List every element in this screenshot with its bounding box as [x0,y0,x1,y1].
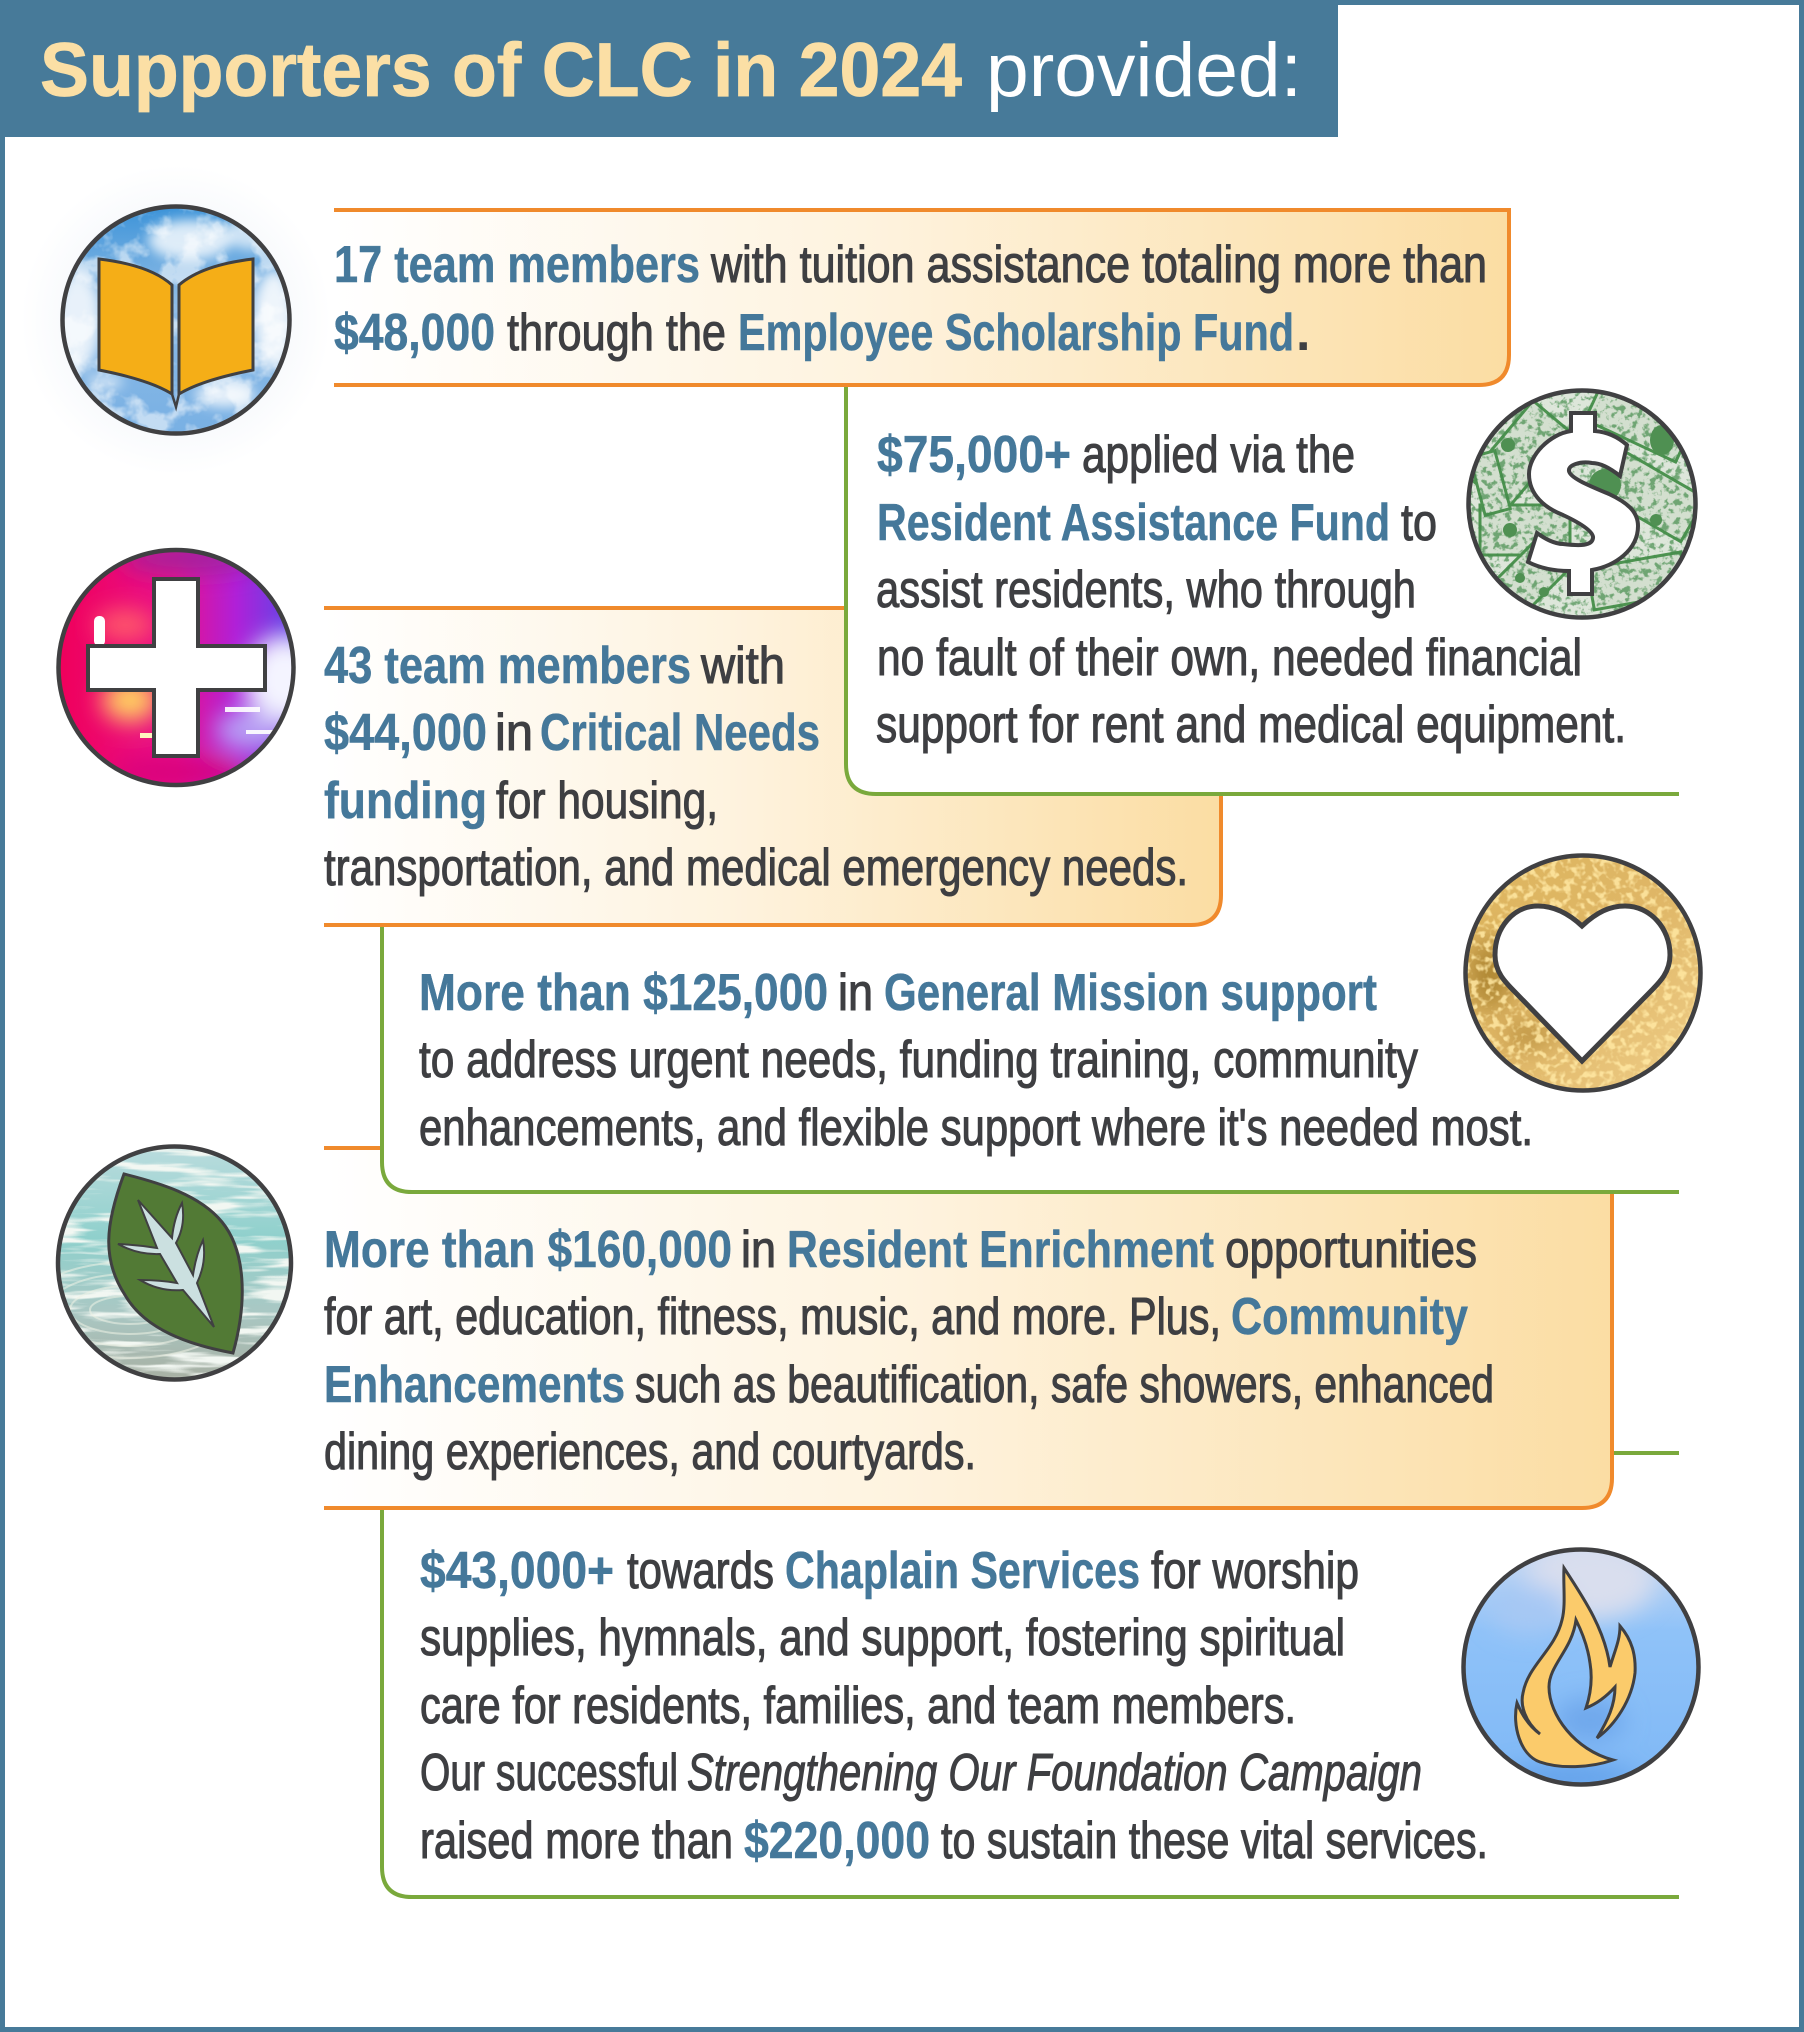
panel: resident enrichment: such as beautification, safe showers, enhanced [635,1356,1494,1414]
panel: critical needs: with [700,637,785,695]
panel: employee scholarship fund: . [1296,304,1310,362]
panel: resident enrichment: in [741,1221,776,1279]
panel: critical needs: $44,000 [324,704,487,762]
panel: chaplain services: $43,000+ [420,1542,614,1600]
panel: general mission support: More than $125,000 [419,964,828,1022]
icon: book [56,205,294,437]
panel: resident assistance fund: assist residents, who through [876,561,1416,619]
panel: chaplain services: Chaplain Services [785,1542,1140,1600]
panel: general mission support [382,925,1679,1192]
title banner: provided: [986,28,1302,113]
panel: general mission support: enhancements, and flexible support where it's needed most. [419,1099,1533,1157]
panel: chaplain services: for worship [1151,1542,1359,1600]
icon: flame [1462,1540,1702,1790]
panel: employee scholarship fund [334,210,1509,385]
panel: employee scholarship fund: 17 team members [334,236,700,294]
panel: employee scholarship fund: $48,000 [334,304,495,362]
panel: resident enrichment: Community [1231,1288,1468,1346]
panel: resident enrichment: for art, education, fitness, music, and more. Plus, [324,1288,1221,1346]
panel: resident enrichment: Enhancements [324,1356,625,1414]
panel: resident assistance fund: to [1401,494,1437,552]
panel: resident assistance fund: support for rent and medical equipment. [876,696,1626,754]
panel: chaplain services: Strengthening Our Foundation Campaign [687,1744,1422,1802]
title banner: Supporters of CLC in 2024 [40,28,962,113]
panel: resident enrichment: More than $160,000 [324,1221,732,1279]
title banner [0,0,1338,137]
panel: general mission support: General Mission support [884,964,1377,1022]
panel: critical needs: 43 team members [324,637,691,695]
panel: chaplain services: supplies, hymnals, and support, fostering spiritual [420,1609,1345,1667]
panel: chaplain services [382,1453,1679,1897]
panel: general mission support: to address urgent needs, funding training, community [419,1031,1418,1089]
panel: general mission support: in [838,964,873,1022]
panel: resident assistance fund: Resident Assistance Fund [877,494,1390,552]
panel: resident assistance fund: $75,000+ [877,426,1071,484]
panel: critical needs: transportation, and medical emergency needs. [324,839,1188,897]
panel: employee scholarship fund: with tuition assistance totaling more than [710,236,1487,294]
panel: chaplain services: raised more than [420,1812,733,1870]
icon: heart [1463,853,1703,1093]
panel: resident enrichment: Resident Enrichment [787,1221,1214,1279]
panel: critical needs [324,608,1221,925]
panel: chaplain services: Our successful [420,1744,678,1802]
panel: employee scholarship fund: Employee Scholarship Fund [738,304,1294,362]
panel: resident enrichment [324,1148,1612,1508]
icon: dollar sign [1466,388,1698,620]
icon: medical cross [56,548,296,788]
panel: chaplain services: towards [627,1542,774,1600]
panel: chaplain services: $220,000 [744,1812,930,1870]
panel: resident enrichment: opportunities [1225,1221,1477,1279]
panel: critical needs: funding [324,772,487,830]
panel: resident assistance fund: no fault of their own, needed financial [877,629,1582,687]
panel: resident assistance fund [846,385,1679,794]
panel: critical needs: in [495,704,533,762]
panel: resident assistance fund: applied via the [1082,426,1355,484]
panel: critical needs: Critical Needs [540,704,820,762]
book icon halo [21,165,331,475]
panel: chaplain services: care for residents, families, and team members. [420,1677,1296,1735]
panel: resident enrichment: dining experiences, and courtyards. [324,1423,976,1481]
panel: chaplain services: to sustain these vital services. [941,1812,1488,1870]
panel: critical needs: for housing, [496,772,718,830]
panel: employee scholarship fund: through the [507,304,726,362]
icon: leaf [56,1144,294,1382]
